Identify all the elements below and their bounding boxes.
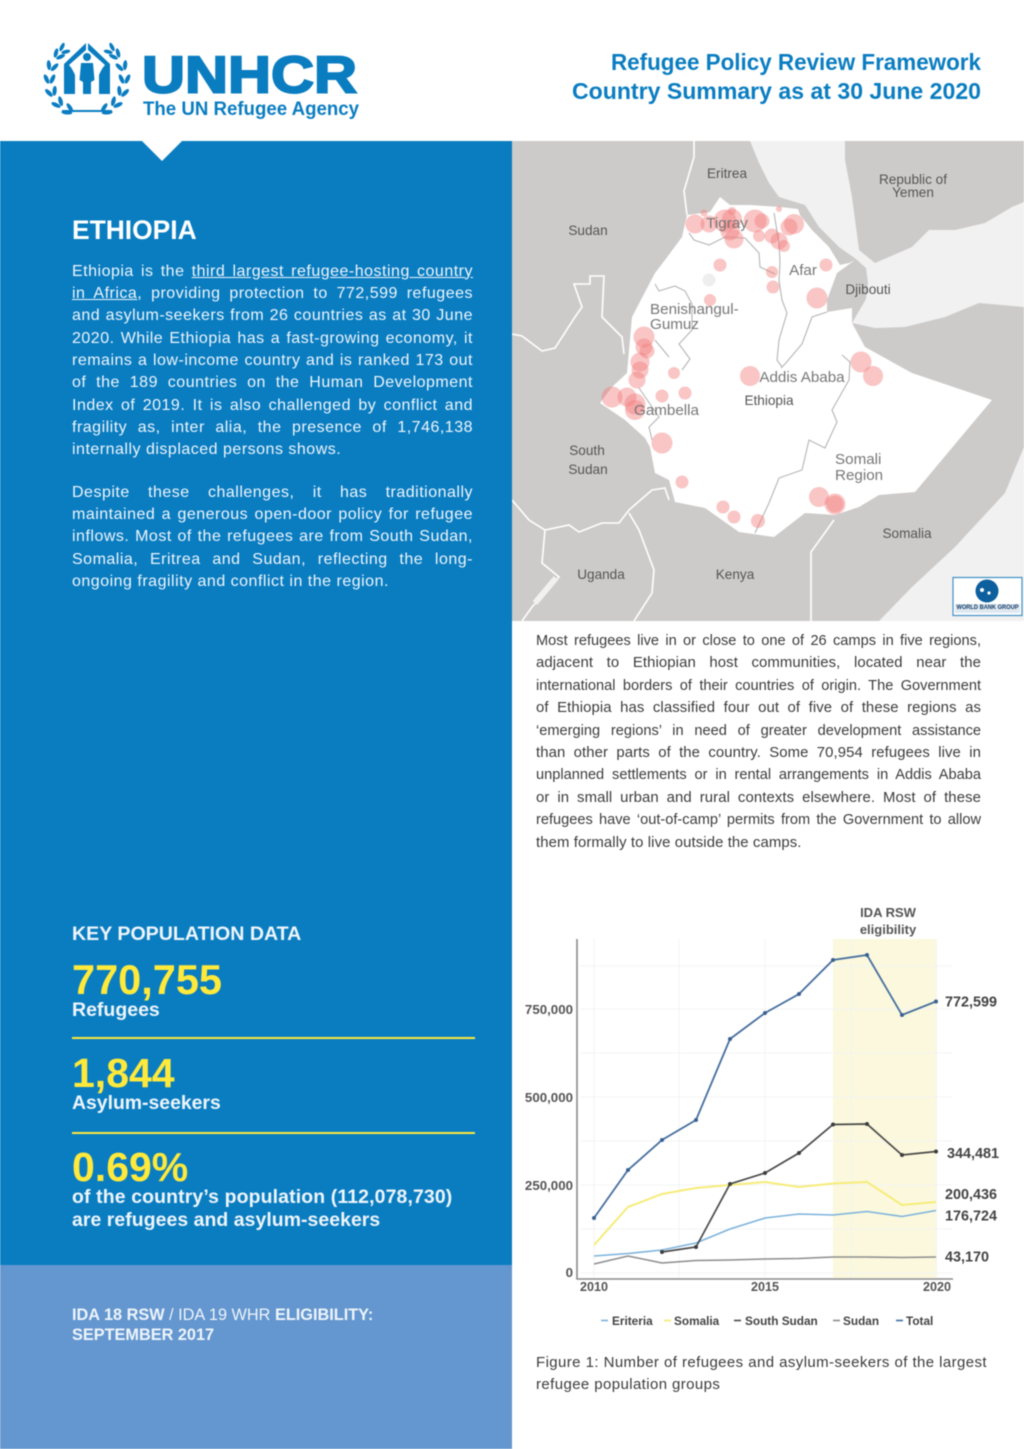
y-axis labels: 0 <box>566 1265 573 1280</box>
country labels: Sudan <box>568 223 608 238</box>
report title <box>572 49 982 105</box>
region labels: Somali <box>835 451 881 468</box>
text block: where refugees live: Most refugees live in or close to one of 26 camps in five regions, <box>536 633 981 649</box>
y-axis labels <box>525 1002 573 1280</box>
stat: share of population <box>72 1144 452 1231</box>
x-axis labels: 2010 <box>580 1280 608 1294</box>
text block: Ethiopia introduction: maintained a generous open-door policy for refugee <box>72 506 473 523</box>
country labels: Republic of <box>879 172 947 187</box>
figure caption: refugee population groups <box>536 1376 720 1393</box>
end-value labels: 43,170 <box>945 1250 989 1266</box>
text block: Ethiopia introduction: Index of 2019. It is also challenged by conflict and <box>72 397 473 414</box>
country labels: Djibouti <box>845 282 891 297</box>
stat: share of population: are refugees and asylum-seekers <box>72 1208 380 1230</box>
text block: Ethiopia introduction: Somalia, Eritrea and Sudan, reflecting the long- <box>72 551 473 568</box>
rule <box>72 1132 475 1134</box>
band label: IDA RSW <box>860 905 917 920</box>
country labels: South <box>569 443 605 458</box>
notch pointer <box>142 141 182 161</box>
refugee camp circles <box>602 206 883 528</box>
text block: where refugees live: unplanned settlements or in rental arrangements in Addis Ababa <box>536 767 981 783</box>
stat: asylum-seekers <box>72 1050 221 1114</box>
legend: Eriteria <box>612 1314 653 1328</box>
tagline: The UN Refugee Agency <box>143 99 359 120</box>
legend: South Sudan <box>745 1314 818 1328</box>
text block: Ethiopia introduction: Ethiopia is the third largest refugee-hosting country <box>72 262 473 280</box>
report title: Refugee Policy Review Framework <box>611 49 981 75</box>
eligibility text: SEPTEMBER 2017 <box>72 1326 214 1344</box>
text block: Ethiopia introduction: remains a low-income country and is ranked 173 out <box>72 352 473 369</box>
text block: where refugees live: international borders of their countries of origin. The Government <box>536 678 981 694</box>
text block: Ethiopia introduction: ongoing fragility and conflict in the region. <box>72 573 389 590</box>
line chart: refugees by origin 2010-2020 <box>524 905 1000 1328</box>
data markers <box>592 953 938 1220</box>
panel: IDA eligibility <box>0 1265 512 1449</box>
series: South Sudan <box>662 1124 936 1252</box>
band label: eligibility <box>860 922 917 937</box>
panel: key population data <box>71 923 476 1231</box>
Ethiopia <box>600 197 992 537</box>
end-value labels: 344,481 <box>947 1146 999 1162</box>
header <box>0 0 1024 141</box>
legend: Total <box>906 1314 933 1328</box>
eligibility text <box>72 1306 373 1344</box>
icon: World Bank Group badge: WORLD BANK GROUP <box>956 605 1018 611</box>
borders <box>512 141 834 621</box>
region labels: Gambella <box>634 402 700 419</box>
region labels: Gumuz <box>650 316 699 333</box>
axes <box>577 939 953 1279</box>
panel: country overview sidebar <box>0 141 512 1265</box>
text block: Ethiopia introduction: inflows. Most of the refugees are from South Sudan, <box>72 528 473 545</box>
text block: where refugees live: or in small urban and rural contexts elsewhere. Most of these <box>536 790 981 806</box>
region labels <box>634 215 883 484</box>
country labels: Ethiopia <box>744 393 794 408</box>
text block: Ethiopia introduction: of the 189 countries on the Human Development <box>72 374 473 391</box>
country labels: Sudan <box>568 462 608 477</box>
eligibility text: IDA 18 RSW / IDA 19 WHR ELIGIBILITY: <box>72 1306 373 1324</box>
x-axis labels: 2020 <box>923 1280 951 1294</box>
icon: wreath and sheltering hands emblem <box>42 42 132 115</box>
stat: share of population: of the country’s population (112,078,730) <box>72 1186 452 1208</box>
wordmark: UNHCR <box>142 46 357 104</box>
band label <box>860 905 917 937</box>
figure caption <box>536 1354 987 1393</box>
country labels: Yemen <box>892 185 934 200</box>
text block: Ethiopia introduction: in Africa, providing protection to 772,599 refugees <box>72 285 473 302</box>
map: Ethiopia refugee camps <box>512 140 1024 622</box>
text block: Ethiopia introduction: Despite these challenges, it has traditionally <box>72 484 473 500</box>
stat: share of population: 0.69% <box>72 1144 188 1190</box>
heading: Ethiopia: ETHIOPIA <box>72 215 197 245</box>
report title: Country Summary as at 30 June 2020 <box>572 78 981 104</box>
region labels: Tigray <box>706 215 748 232</box>
text block: where refugees live: than other parts of the country. Some 70,954 refugees live in <box>536 745 981 761</box>
region labels: Benishangul- <box>650 301 739 318</box>
legend: Sudan <box>843 1314 879 1328</box>
text block: Ethiopia introduction: 2020. While Ethiopia has a fast-growing economy, it <box>72 330 473 347</box>
text block: Ethiopia introduction: and asylum-seekers from 26 countries as at 30 June <box>72 307 473 324</box>
end-value labels: 176,724 <box>945 1208 997 1224</box>
end-value labels <box>945 994 999 1266</box>
text block: where refugees live: them formally to live outside the camps. <box>536 835 802 851</box>
legend: Somalia <box>674 1314 720 1328</box>
country labels: Eritrea <box>707 166 747 181</box>
country labels <box>568 166 947 582</box>
end-value labels: 772,599 <box>945 994 997 1010</box>
y-axis labels: 750,000 <box>525 1002 573 1017</box>
lake <box>535 578 556 603</box>
series: Total <box>594 955 936 1218</box>
series: Sudan <box>594 1256 936 1264</box>
rule <box>72 1037 475 1039</box>
region labels: Region <box>835 467 883 484</box>
UNHCR logo <box>42 42 360 120</box>
legend <box>601 1314 933 1328</box>
stat: asylum-seekers: 1,844 <box>72 1050 175 1096</box>
IDA RSW eligibility band <box>833 939 937 1278</box>
regional boundaries <box>639 213 850 533</box>
x-axis labels: 2015 <box>751 1280 779 1294</box>
icon: World Bank Group badge <box>953 578 1022 616</box>
series: Eritrea <box>594 1210 936 1256</box>
land base <box>512 141 1024 621</box>
sea <box>750 141 1024 328</box>
stat: refugees: Refugees <box>72 999 160 1021</box>
text block: Ethiopia introduction: internally displaced persons shows. <box>72 441 341 458</box>
region labels: Afar <box>789 262 817 279</box>
country labels: Uganda <box>577 567 625 582</box>
y-axis labels: 500,000 <box>525 1090 573 1105</box>
heading: key population data: KEY POPULATION DATA <box>72 923 301 945</box>
y-axis labels: 250,000 <box>525 1178 573 1193</box>
stat: refugees: 770,755 <box>72 956 222 1003</box>
end-value labels: 200,436 <box>945 1187 997 1203</box>
country labels: Kenya <box>716 567 755 582</box>
text block: where refugees live: of Ethiopia has classified four out of five of these regions as <box>536 700 981 716</box>
text block: where refugees live: adjacent to Ethiopian host communities, located near the <box>536 655 981 671</box>
text block: Ethiopia introduction <box>71 262 474 590</box>
series: Somalia <box>594 1182 936 1245</box>
x-axis labels <box>580 1280 951 1294</box>
text block: Ethiopia introduction: fragility as, inter alia, the presence of 1,746,138 <box>72 419 473 436</box>
country labels: Somalia <box>882 526 932 541</box>
text block: where refugees live: refugees have ‘out-of-camp’ permits from the Government to allow <box>536 812 981 828</box>
text block: where refugees live: ‘emerging regions’ in need of greater development assistance <box>536 723 981 739</box>
text block: where refugees live <box>536 633 982 851</box>
region labels: Addis Ababa <box>759 369 845 386</box>
figure caption: Figure 1: Number of refugees and asylum-seekers of the largest <box>536 1354 987 1370</box>
stat: asylum-seekers: Asylum-seekers <box>72 1092 221 1114</box>
